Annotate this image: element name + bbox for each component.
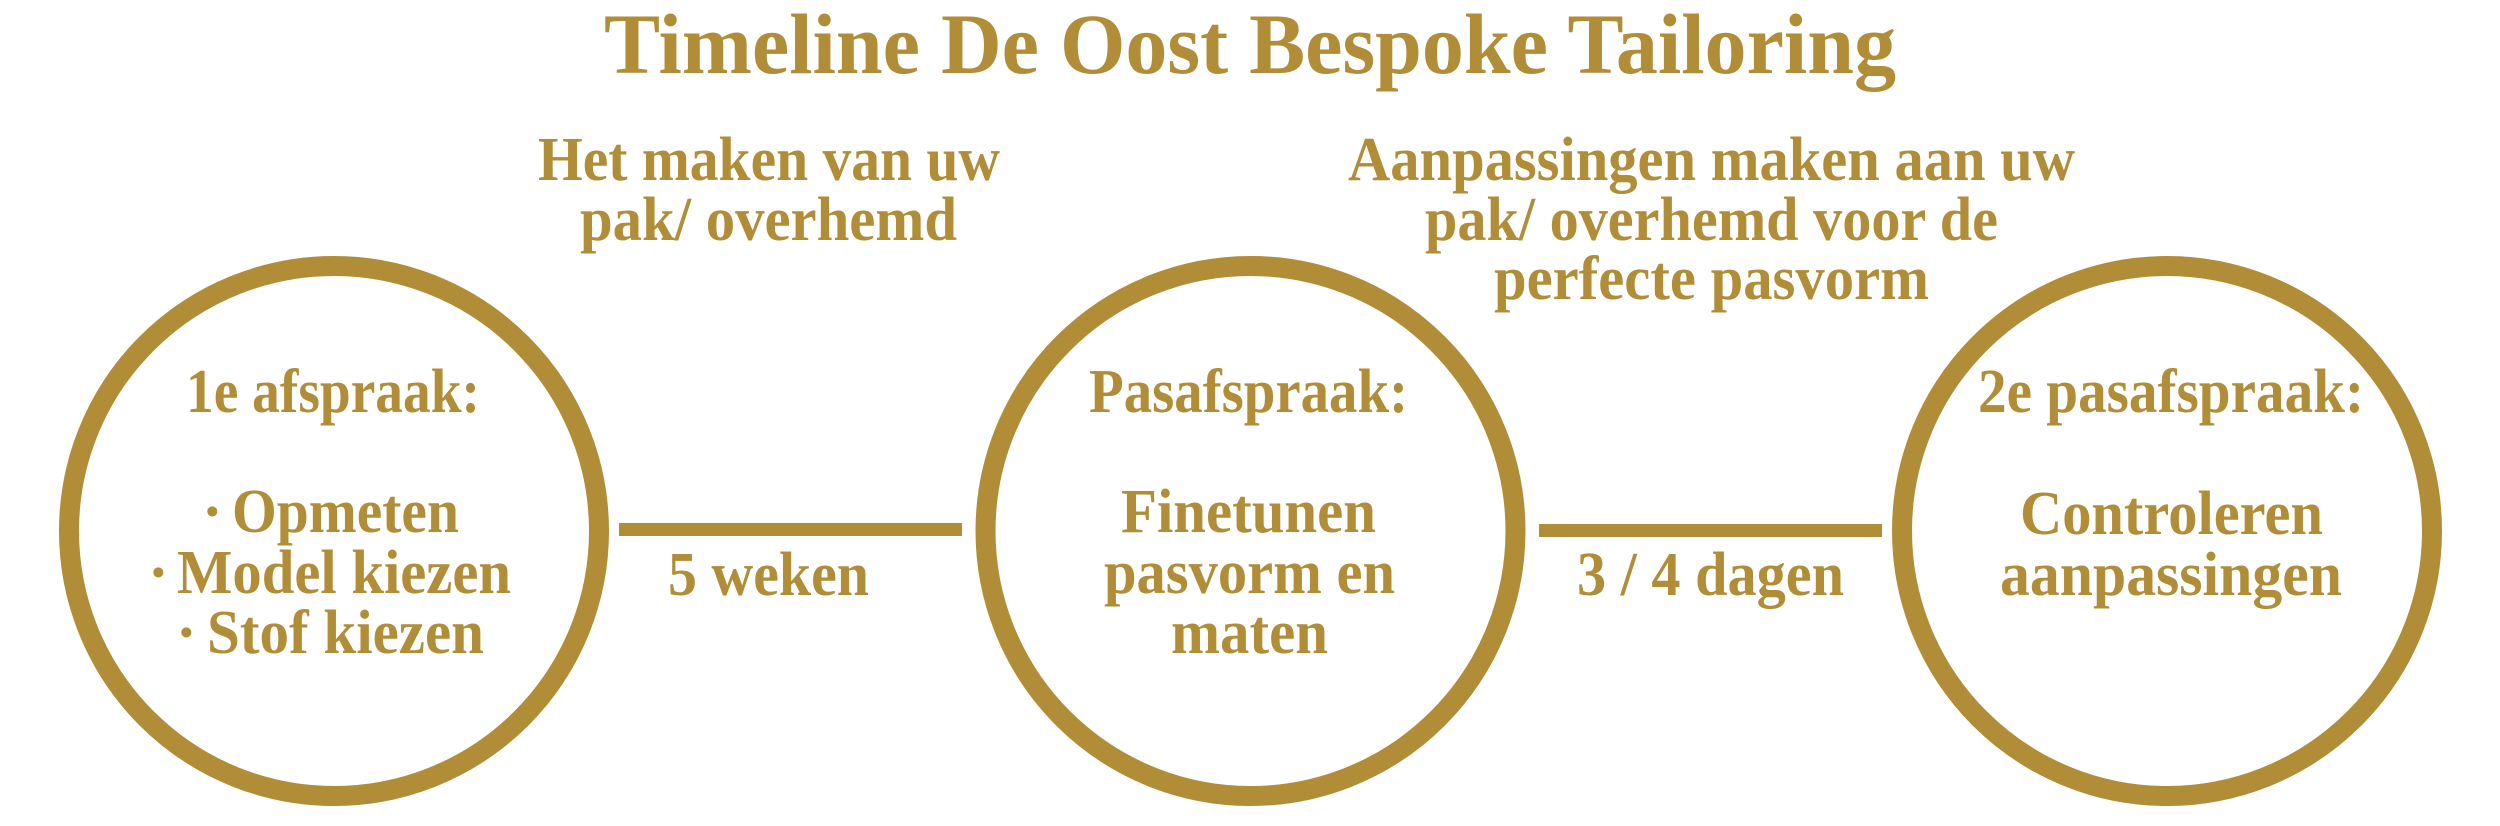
text: fitting appointment details: Finetunen bbox=[1121, 478, 1376, 546]
panel: second fitting appointment bbox=[1902, 266, 2432, 796]
text: fitting appointment details bbox=[1104, 478, 1395, 667]
panel: fitting appointment bbox=[986, 266, 1516, 796]
text: first appointment list: Opmeten bbox=[232, 478, 459, 546]
label: 5 weeks: 5 weken bbox=[668, 541, 869, 609]
text block: making the suit: Het maken van uw bbox=[538, 126, 1000, 194]
circle: fitting appointment bbox=[986, 266, 1516, 796]
panel: first appointment bbox=[69, 266, 599, 796]
text: first appointment heading: 1e afspraak: bbox=[186, 358, 480, 426]
text: first appointment list bbox=[148, 478, 511, 667]
circle: second fitting appointment bbox=[1902, 266, 2432, 796]
text block: adjustments bbox=[1348, 126, 2075, 313]
connector: 5 weeks bbox=[619, 523, 962, 609]
text: first appointment list: · bbox=[202, 478, 223, 546]
text block: adjustments: pak/ overhemd voor de bbox=[1425, 186, 1998, 254]
text: first appointment list: Model kiezen bbox=[177, 539, 511, 607]
circle: first appointment bbox=[69, 266, 599, 796]
text: first appointment list: · bbox=[148, 539, 169, 607]
text block: making the suit bbox=[538, 126, 1000, 254]
text: second fitting heading: 2e pasafspraak: bbox=[1978, 358, 2364, 426]
line: connector two bbox=[1539, 524, 1882, 537]
line: connector one bbox=[619, 523, 962, 536]
label: 3 / 4 days: 3 / 4 dagen bbox=[1577, 541, 1844, 609]
connector: 3 / 4 days bbox=[1539, 524, 1882, 609]
text: second fitting details: Controleren bbox=[2020, 480, 2323, 548]
text: second fitting details: aanpassingen bbox=[2000, 541, 2342, 609]
text: fitting appointment heading: Pasafspraak: bbox=[1089, 358, 1408, 426]
text: first appointment list: · bbox=[176, 599, 197, 667]
text: fitting appointment details: maten bbox=[1171, 599, 1328, 667]
text block: adjustments: Aanpassingen maken aan uw bbox=[1348, 126, 2075, 194]
text block: making the suit: pak/ overhemd bbox=[580, 186, 957, 254]
text block: adjustments: perfecte pasvorm bbox=[1494, 245, 1929, 313]
text: fitting appointment details: pasvorm en bbox=[1104, 539, 1395, 607]
text: first appointment list: Stof kiezen bbox=[207, 599, 484, 667]
text: second fitting details bbox=[2000, 480, 2342, 609]
